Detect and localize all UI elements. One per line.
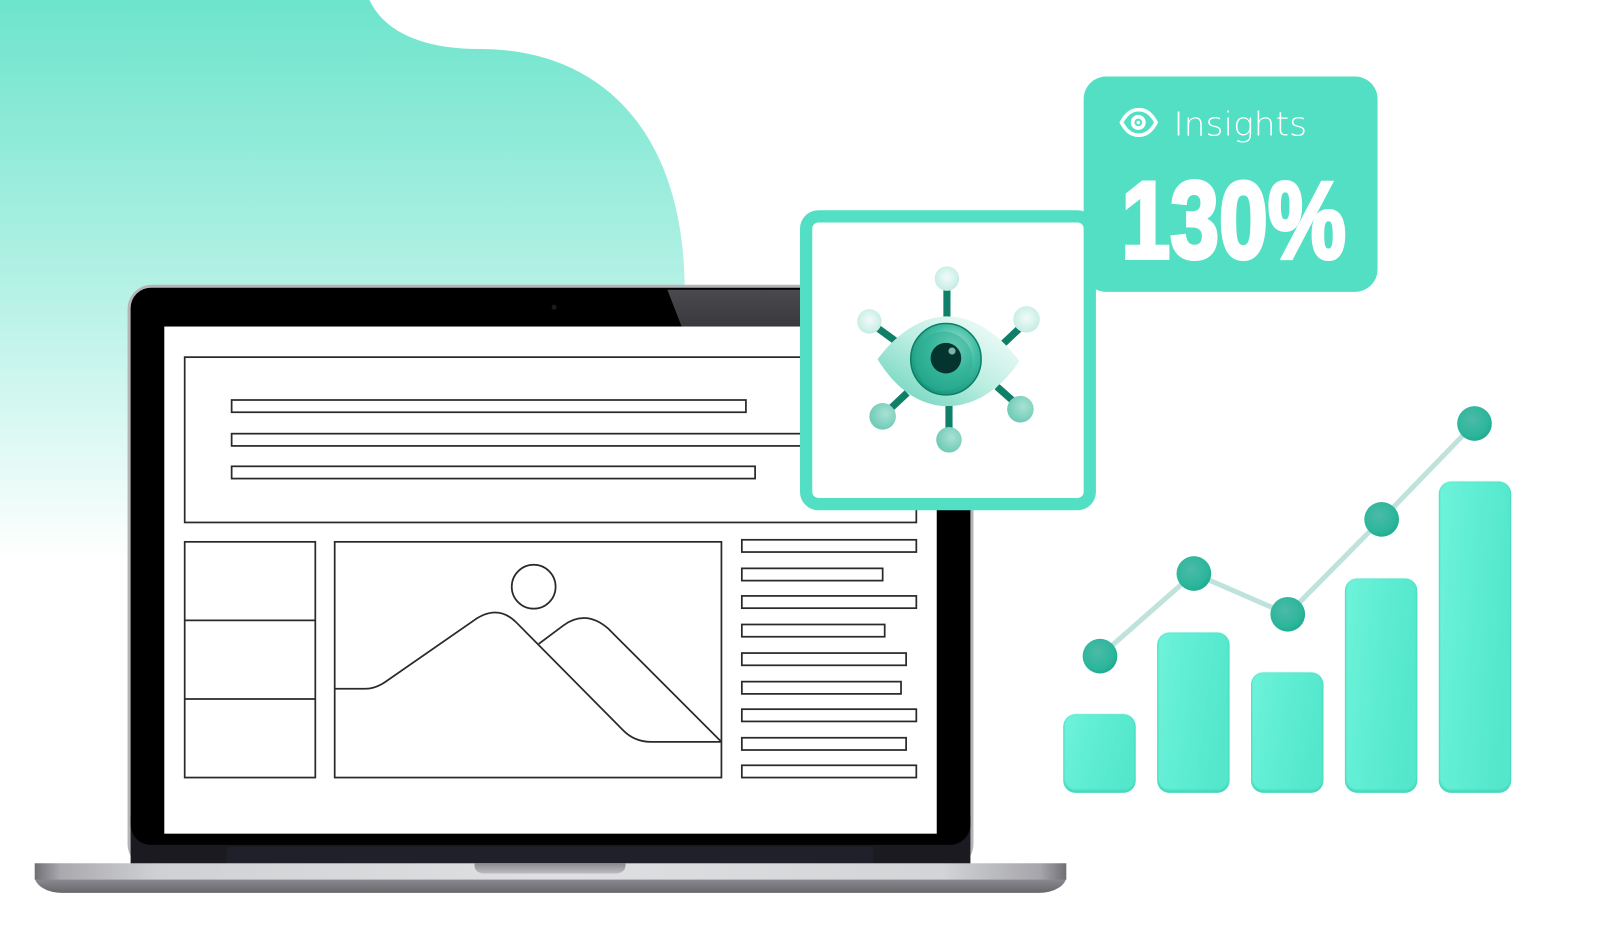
wireframe: left column (185, 542, 315, 778)
thumb notch (474, 863, 626, 873)
background blob (0, 0, 685, 571)
lid reflection (667, 290, 816, 327)
wireframe: page layout on screen (185, 357, 916, 778)
iris (911, 323, 981, 395)
wireframe: text lines (742, 540, 916, 778)
growth chart (1063, 406, 1511, 793)
laptop bezel (131, 288, 970, 845)
wireframe: image placeholder (335, 542, 721, 778)
eye card (806, 216, 1090, 504)
label: Insights: Insights (1173, 106, 1307, 144)
spokes (876, 289, 1021, 431)
laptop (35, 285, 1066, 893)
lower bezel (131, 816, 970, 865)
insights card (1084, 77, 1378, 292)
knobs (857, 266, 1040, 453)
hinge strip (227, 847, 873, 863)
laptop base (35, 863, 1066, 893)
screen (164, 327, 937, 834)
bars (1063, 482, 1511, 793)
laptop lid (128, 285, 973, 868)
value: 130%: 130% (1121, 160, 1346, 282)
icon: 3D eye network (857, 266, 1040, 453)
trend line (1100, 423, 1474, 656)
pupil (931, 343, 961, 373)
eyeball body (878, 316, 1019, 406)
data points (1083, 406, 1492, 673)
camera (552, 305, 557, 310)
icon: eye outline (1121, 110, 1156, 135)
wireframe: header panel (185, 357, 916, 522)
